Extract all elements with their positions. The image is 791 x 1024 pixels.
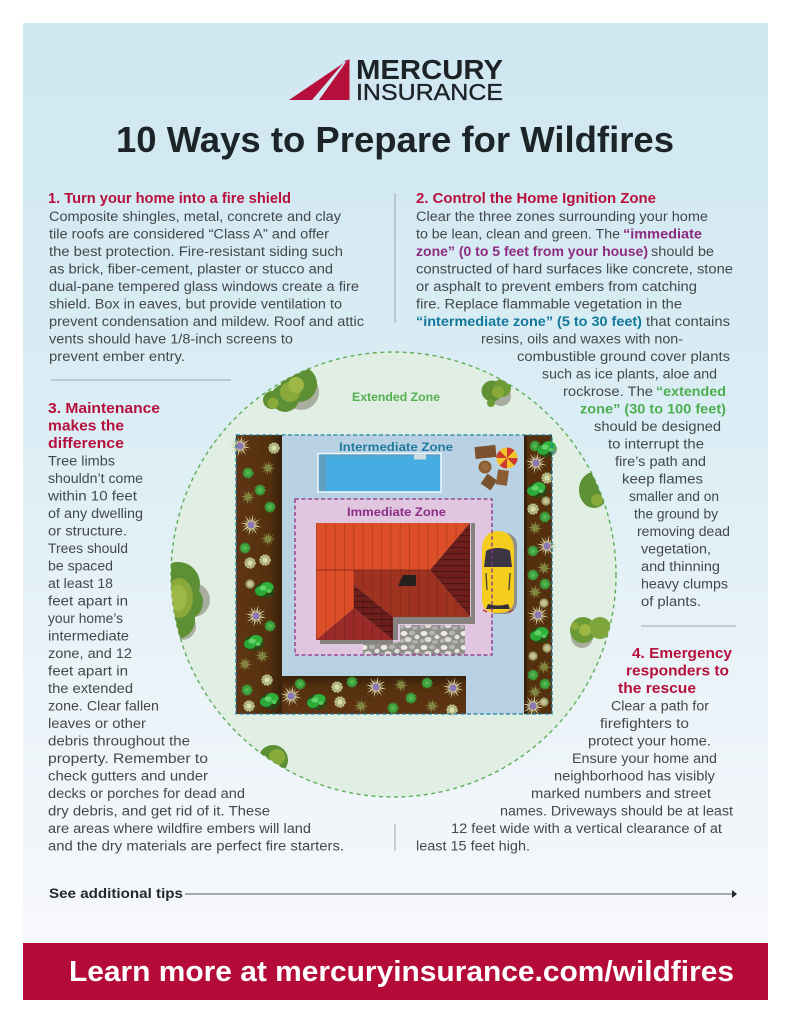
text: tip 2 body: and thinning bbox=[641, 559, 720, 575]
house roof bbox=[316, 523, 475, 644]
panel: tip 4 emergency responders bbox=[416, 646, 733, 854]
text: tip 3 body: of any dwelling bbox=[48, 506, 143, 522]
text: tip 4 body: names. Driveways should be at least bbox=[500, 804, 733, 820]
text: tip 3 body: zone. Clear fallen bbox=[48, 698, 159, 714]
immediate zone fill bbox=[295, 499, 492, 655]
text: tip 4 body bbox=[416, 698, 733, 854]
intermediate zone ground bbox=[236, 435, 552, 714]
heading: tip 4: 4. Emergency bbox=[632, 646, 732, 662]
tree: right upper bbox=[579, 472, 604, 508]
text: tip 1 body: prevent ember entry. bbox=[49, 349, 185, 365]
text: tip 2 body: should be bbox=[651, 244, 714, 260]
text: tip 3 body: dry debris, and get rid of it. These bbox=[48, 804, 270, 820]
heading: tip 4: the rescue bbox=[618, 681, 696, 697]
icon: red road triangle bbox=[289, 59, 350, 100]
intermediate zone dashed boundary bbox=[236, 435, 552, 714]
text: tip 2 body bbox=[416, 209, 733, 610]
text: tip 1 body: as brick, fiber-cement, plaster or stucco and bbox=[49, 262, 333, 278]
text: tip 1 body: Composite shingles, metal, concrete and clay bbox=[49, 209, 342, 225]
text: tip 1 body: tile roofs are considered “Class A” and offer bbox=[49, 226, 329, 242]
text: tip 3 body: check gutters and under bbox=[48, 768, 208, 784]
text: tip 2 body: the ground by bbox=[634, 506, 719, 522]
car bbox=[482, 531, 517, 614]
text: tip 2 body: zone” (0 to 5 feet from your house) bbox=[416, 244, 648, 260]
mulch beds bbox=[236, 435, 552, 714]
heading: tip 1: 1. Turn your home into a fire shield bbox=[48, 191, 291, 207]
logo bbox=[289, 54, 503, 105]
text: tip 1 body: the best protection. Fire-resistant siding such bbox=[49, 244, 343, 260]
panel: tip 2 home ignition zone bbox=[416, 191, 733, 610]
text: tip 4 body: firefighters to bbox=[600, 716, 689, 732]
text: tip 3 body: are areas where wildfire embers will land bbox=[48, 821, 311, 837]
text: tip 2 body: zone” (30 to 100 feet) bbox=[580, 402, 726, 418]
chimney bbox=[398, 575, 416, 586]
text: tip 3 body: Trees should bbox=[48, 541, 128, 557]
text: tip 2 body: Clear the three zones surrounding your home bbox=[416, 209, 708, 225]
footer banner bbox=[23, 943, 768, 1000]
tree: top right bbox=[482, 379, 511, 407]
text: tip 3 body: intermediate bbox=[48, 628, 129, 644]
tree: bottom left bbox=[260, 745, 288, 769]
text: tip 3 body: the extended bbox=[48, 681, 133, 697]
text: tip 2 body: to interrupt the bbox=[608, 436, 704, 452]
text: tip 3 body: or structure. bbox=[48, 524, 127, 540]
text: tip 1 body: prevent condensation and mildew. Roof and attic bbox=[49, 314, 364, 330]
immediate zone dashed boundary bbox=[295, 499, 492, 655]
text: tip 2 body: keep flames bbox=[622, 472, 703, 488]
panel: tip 3 maintenance bbox=[47, 401, 344, 854]
logo wordmark bbox=[356, 54, 503, 105]
pool bbox=[318, 454, 441, 492]
stone path bbox=[363, 625, 465, 655]
text: tip 3 body: Tree limbs bbox=[48, 454, 115, 470]
text: tip 2 body: rockrose. The bbox=[563, 384, 653, 400]
text: tip 1 body bbox=[49, 209, 364, 365]
text: tip 2 body: smaller and on bbox=[629, 489, 719, 505]
patio furniture bbox=[474, 445, 518, 490]
text: tip 4 body: protect your home. bbox=[588, 734, 711, 750]
text: tip 2 body: “extended bbox=[656, 384, 726, 400]
text: tip 2 body: “immediate bbox=[623, 226, 702, 242]
text: tip 3 body: debris throughout the bbox=[48, 734, 190, 750]
heading: tip 3: difference bbox=[48, 436, 124, 452]
text: tip 3 body: decks or porches for dead and bbox=[48, 786, 245, 802]
title: 10 Ways to Prepare for Wildfires bbox=[116, 119, 674, 160]
text: tip 3 body: and the dry materials are perfect fire starters. bbox=[48, 838, 344, 854]
text: tip 1 body: shield. Box in eaves, but provide ventilation to bbox=[49, 296, 342, 312]
logo wordmark: INSURANCE bbox=[356, 79, 503, 105]
planting bbox=[227, 433, 560, 719]
text: tip 3 body: within 10 feet bbox=[47, 488, 137, 504]
text: tip 2 body: removing dead bbox=[637, 524, 730, 540]
text: tip 2 body: vegetation, bbox=[641, 542, 711, 558]
text: tip 2 body: constructed of hard surfaces like concrete, stone bbox=[416, 262, 733, 278]
text: tip 1 body: vents should have 1/8-inch screens to bbox=[49, 332, 293, 348]
text: tip 3 body bbox=[47, 454, 344, 854]
tree: left bbox=[171, 562, 210, 640]
text: tip 4 body: neighborhood has visibly bbox=[554, 768, 716, 784]
extended zone label: Extended Zone bbox=[352, 392, 440, 404]
text: tip 4 body: Ensure your home and bbox=[572, 751, 717, 767]
text: tip 2 body: fire. Replace flammable vegetation in the bbox=[416, 296, 682, 312]
heading: tip 2: 2. Control the Home Ignition Zone bbox=[416, 191, 656, 207]
zone diagram bbox=[156, 352, 616, 797]
heading: tip 3 bbox=[48, 401, 160, 452]
heading: tip 4: responders to bbox=[626, 664, 729, 680]
text: tip 2 body: of plants. bbox=[641, 594, 701, 610]
footer banner: Learn more at mercuryinsurance.com/wildfires bbox=[69, 956, 734, 988]
text: tip 2 body: heavy clumps bbox=[641, 576, 728, 592]
text: tip 3 body: at least 18 bbox=[48, 576, 113, 592]
text: tip 1 body: dual-pane tempered glass windows create a fire bbox=[49, 279, 359, 295]
trees bbox=[156, 366, 611, 775]
text: tip 4 body: least 15 feet high. bbox=[416, 838, 530, 854]
heading: tip 3: makes the bbox=[48, 418, 124, 434]
text: tip 3 body: zone, and 12 bbox=[48, 646, 132, 662]
text: tip 2 body: that contains bbox=[646, 314, 730, 330]
umbrella bbox=[496, 448, 518, 468]
dividers bbox=[51, 193, 736, 851]
text: tip 2 body: fire’s path and bbox=[615, 454, 706, 470]
text: tip 2 body: such as ice plants, aloe and bbox=[542, 366, 717, 382]
text: tip 3 body: be spaced bbox=[48, 558, 113, 574]
panel: tip 1 fire shield bbox=[48, 191, 364, 365]
heading: tip 4 bbox=[618, 646, 732, 697]
intermediate zone label: Intermediate Zone bbox=[339, 442, 453, 454]
tree: right lower bbox=[570, 617, 611, 648]
text: tip 3 body: your home’s bbox=[48, 611, 123, 627]
text: tip 2 body: should be designed bbox=[594, 419, 721, 435]
logo wordmark: MERCURY bbox=[356, 54, 503, 85]
heading: tip 3: 3. Maintenance bbox=[48, 401, 160, 417]
text: tip 3 body: feet apart in bbox=[48, 594, 128, 610]
text: tip 3 body: shouldn’t come bbox=[48, 471, 143, 487]
text: tip 3 body: property. Remember to bbox=[48, 751, 208, 767]
text: tip 4 body: 12 feet wide with a vertical clearance of at bbox=[451, 821, 722, 837]
immediate zone label: Immediate Zone bbox=[347, 507, 446, 519]
see additional tips arrow: See additional tips bbox=[49, 886, 183, 901]
text: tip 2 body: to be lean, clean and green. The bbox=[416, 226, 620, 242]
text: tip 2 body: resins, oils and waxes with non- bbox=[481, 332, 683, 348]
tree: top left bbox=[263, 366, 319, 412]
text: tip 3 body: feet apart in bbox=[48, 664, 128, 680]
text: tip 3 body: leaves or other bbox=[48, 716, 146, 732]
text: tip 2 body: combustible ground cover plants bbox=[517, 349, 730, 365]
extended zone circle bbox=[171, 352, 616, 797]
text: tip 2 body: or asphalt to prevent embers from catching bbox=[416, 279, 697, 295]
text: tip 4 body: marked numbers and street bbox=[531, 786, 711, 802]
see additional tips arrow bbox=[49, 886, 737, 901]
text: tip 4 body: Clear a path for bbox=[611, 698, 709, 714]
text: tip 2 body: “intermediate zone” (5 to 30 feet) bbox=[416, 314, 642, 330]
